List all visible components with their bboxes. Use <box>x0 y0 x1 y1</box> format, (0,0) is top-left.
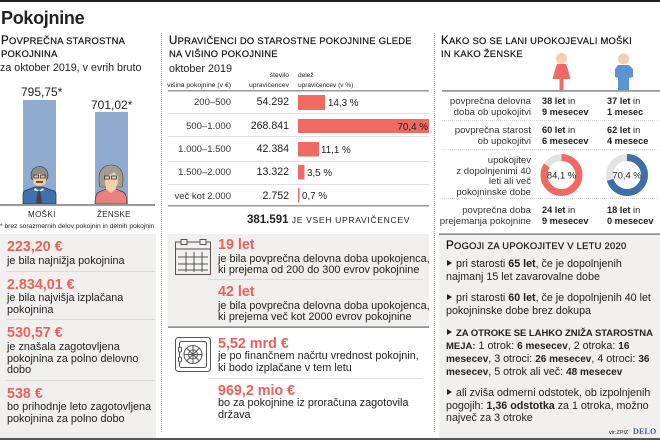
stat: 42 years <box>217 284 430 323</box>
row: over 2000 <box>174 188 327 202</box>
stat: next year pension: pokojnina za polno dobo <box>7 413 125 425</box>
row: 1500-2000: 13.322 <box>257 166 289 178</box>
bar: women: 701,02* <box>91 98 133 112</box>
row: working period: doba ob upokojitvi <box>454 107 531 118</box>
row: 1500-2000: 3,5 % <box>307 168 332 179</box>
panel: average pension <box>0 34 155 230</box>
row: working period: 38 let in <box>542 96 575 106</box>
donut: women <box>544 158 579 192</box>
subtitle: za oktober 2019, v evrih bruto <box>0 62 141 74</box>
footnote: * brez sorazmernih delov pokojnin in delnih pokojnin <box>0 223 155 230</box>
row: retirement with 40 years: upokojitev <box>488 155 531 166</box>
heading: average pension: POKOJNINA <box>1 48 58 59</box>
axis <box>0 204 155 206</box>
stat: guaranteed pension: dobo <box>7 364 31 376</box>
table header <box>167 72 353 89</box>
row: retirement age: ob upokojitvi <box>478 136 531 147</box>
bar: men: 795,75* <box>21 85 63 99</box>
row: 1000-1500 <box>178 142 351 156</box>
panel: men and women comparison <box>440 34 660 227</box>
row: 1000-1500: 11,1 % <box>321 145 351 156</box>
table header: višina pokojnine (v €) <box>167 82 231 89</box>
label: men: MOŠKI <box>28 210 56 219</box>
icon: woman <box>95 165 127 204</box>
stat: 5.52 billion: 5,52 mrd € <box>218 336 289 352</box>
row: 200-500: 14,3 % <box>328 98 359 109</box>
stat: guaranteed pension: 530,57 € <box>7 325 63 341</box>
table header: upravičencev (v %) <box>298 82 353 89</box>
row: retirement age <box>455 125 648 147</box>
label: women: ŽENSKE <box>97 210 131 219</box>
row: duration of pension: povprečna doba <box>462 205 532 216</box>
row: 200-500: 54.292 <box>257 96 289 108</box>
stat: lowest pension <box>6 239 126 267</box>
row: duration of pension: 0 mesecev <box>607 216 654 226</box>
stat: 42 years: ki prejema več kot 2000 evrov pokojnine <box>218 311 412 323</box>
icon: safe <box>176 338 210 372</box>
row: 200-500: 200–500 <box>194 97 231 108</box>
icon: man figure <box>615 54 633 90</box>
row: 500-1000: 268.841 <box>251 120 289 132</box>
condition: percentage: pogojih: 1,36 odstotka za 1 otroka, možno <box>446 400 649 412</box>
source credit: vir:ZPIZ <box>609 430 629 436</box>
row: over 2000: 0,7 % <box>302 191 327 202</box>
heading: beneficiaries: NA VIŠINO POKOJNINE <box>169 48 278 59</box>
panel: pension facts <box>0 234 156 438</box>
row: working period: povprečna delovna <box>450 96 532 107</box>
row: working period: 37 let in <box>607 96 640 106</box>
stat: 969.2 million <box>218 383 409 421</box>
condition: children <box>446 327 653 378</box>
source credit <box>609 427 656 436</box>
table header: število <box>270 72 289 79</box>
icon: man <box>23 166 56 204</box>
row: 1500-2000: 1.500–2.000 <box>178 167 231 178</box>
condition: age 65: najmanj 15 let zavarovalne dobe <box>446 271 600 283</box>
row: over 2000: 2.752 <box>262 190 289 202</box>
bar: men <box>21 85 63 204</box>
condition: age 60: pokojninske dobe brez dokupa <box>446 305 591 317</box>
table header: upravičencev <box>249 82 290 89</box>
stat: highest pension: 2.834,01 € <box>7 277 75 293</box>
stat: 42 years: je bila povprečna delovna doba upokojenca, <box>217 300 430 312</box>
source credit: DELO <box>633 427 656 436</box>
stat: 19 years <box>217 237 430 276</box>
donut: women: 84,1 % <box>547 170 576 180</box>
condition: percentage <box>446 387 650 424</box>
row: 1500-2000 <box>178 165 332 180</box>
row: retirement with 40 years: z dopolnjenimi 40 <box>456 166 531 177</box>
panel: working period <box>168 234 430 328</box>
row: 500-1000: 70,4 % <box>397 122 428 133</box>
row: duration of pension: 18 let in <box>607 205 640 215</box>
heading: conditions: POGOJI ZA UPOKOJITEV V LETU 2020 <box>446 239 626 252</box>
heading: beneficiaries: UPRAVIČENCI DO STAROSTNE POKOJNINE GLEDE <box>169 34 412 47</box>
condition: children: mesecev, 5 otrok ali več: 48 mesecev <box>446 366 623 378</box>
donut: men: 70,4 % <box>612 170 642 180</box>
row: 500-1000 <box>186 119 429 133</box>
heading: men and women: KAKO SO SE LANI UPOKOJEVALI MOŠKI <box>441 34 632 47</box>
bar: women <box>91 98 133 204</box>
row: retirement with 40 years: leti ali več <box>489 176 531 187</box>
stat: 19 years: je bila povprečna delovna doba upokojenca, <box>217 253 430 265</box>
table header: delež <box>298 72 314 79</box>
row: retirement age: 6 mesecev <box>542 136 589 146</box>
stat: 5.52 billion: ki bodo izplačane v tem letu <box>218 362 352 374</box>
stat: guaranteed pension: je znašala zagotovljena <box>6 341 121 353</box>
row: retirement age: 62 let in <box>607 125 640 135</box>
row: duration of pension: prejemanja pokojnine <box>440 216 531 227</box>
condition: children: mesecev, 3 otroci: 26 mesecev, 4 otroci: 36 <box>446 353 650 365</box>
stat: 42 years: 42 let <box>218 284 255 300</box>
condition: children: ZA OTROKE SE LAHKO ZNIŽA STAROSTNA <box>456 327 653 339</box>
row: 500-1000: 500–1.000 <box>186 121 231 132</box>
stat: guaranteed pension: pokojnina za polno delovno <box>7 353 138 365</box>
row: retirement with 40 years: pokojninske dobe <box>456 187 531 198</box>
stat: 5.52 billion: je po finančnem načrtu vrednost pokojnin, <box>217 350 419 362</box>
row: retirement age: povprečna starost <box>455 125 531 136</box>
condition: age 60: pri starosti 60 let, če je dopolnjenih 40 let <box>456 292 651 304</box>
stat: 19 years: ki prejema od 200 do 300 evrov pokojnine <box>218 264 419 276</box>
row: retirement with 40 years <box>456 155 644 198</box>
row: duration of pension: 9 mesecev <box>542 216 589 226</box>
icon: woman figure <box>552 53 570 90</box>
row: duration of pension <box>440 205 654 227</box>
condition: percentage: ali zviša odmerni odstotek, ob izpolnjenih <box>456 387 650 399</box>
stat: highest pension: pokojnina <box>7 304 54 316</box>
panel: pension value <box>176 336 423 421</box>
stat: 5.52 billion <box>217 336 419 374</box>
row: duration of pension: 24 let in <box>542 205 575 215</box>
stat: next year pension <box>7 386 152 425</box>
row: 1000-1500: 1.000–1.500 <box>178 144 231 155</box>
stat: lowest pension: 223,20 € <box>7 239 63 255</box>
stat: highest pension <box>6 277 124 316</box>
row: working period <box>450 96 643 118</box>
icon: calendar <box>176 240 210 274</box>
stat: 19 years: 19 let <box>218 237 255 253</box>
title: Pokojnine <box>1 8 85 28</box>
stat: 969.2 million: država <box>218 409 252 421</box>
condition: children: MEJA: 1 otrok: 6 mesecev, 2 otroka: 16 <box>446 340 630 352</box>
heading: men and women: IN KAKO ŽENSKE <box>441 48 523 59</box>
donut: men <box>610 158 644 192</box>
stat: 969.2 million: bo za pokojnine iz proračuna zagotovila <box>218 397 409 409</box>
stat: 969.2 million: 969,2 mio € <box>218 383 295 399</box>
stat: next year pension: bo prihodnje leto zagotovljena <box>7 401 152 413</box>
panel: retirement conditions <box>439 234 660 438</box>
panel: beneficiaries table <box>167 34 429 226</box>
condition: age 65: pri starosti 65 let, če je dopolnjenih <box>456 258 622 270</box>
row: 200-500 <box>194 95 359 110</box>
row: retirement age: 4 mesece <box>607 136 648 146</box>
heading: average pension: POVPREČNA STAROSTNA <box>1 34 125 47</box>
row: working period: 9 mesecev <box>542 107 589 117</box>
stat: next year pension: 538 € <box>7 386 43 402</box>
subtitle: oktober 2019 <box>169 63 232 75</box>
condition: age 60 <box>446 292 651 317</box>
stat: guaranteed pension <box>6 325 138 376</box>
total: 381.591 JE VSEH UPRAVIČENCEV <box>247 214 410 226</box>
condition: percentage: največ za 3 otroke <box>446 412 533 424</box>
row: working period: 1 mesec <box>607 107 643 117</box>
row: over 2000: več kot 2.000 <box>174 191 231 202</box>
stat: lowest pension: je bila najnižja pokojnina <box>6 255 126 267</box>
condition: age 65 <box>446 258 622 283</box>
stat: highest pension: je bila najvišja izplačana <box>6 292 124 304</box>
row: retirement age: 60 let in <box>542 125 575 135</box>
row: 1000-1500: 42.384 <box>257 143 289 155</box>
